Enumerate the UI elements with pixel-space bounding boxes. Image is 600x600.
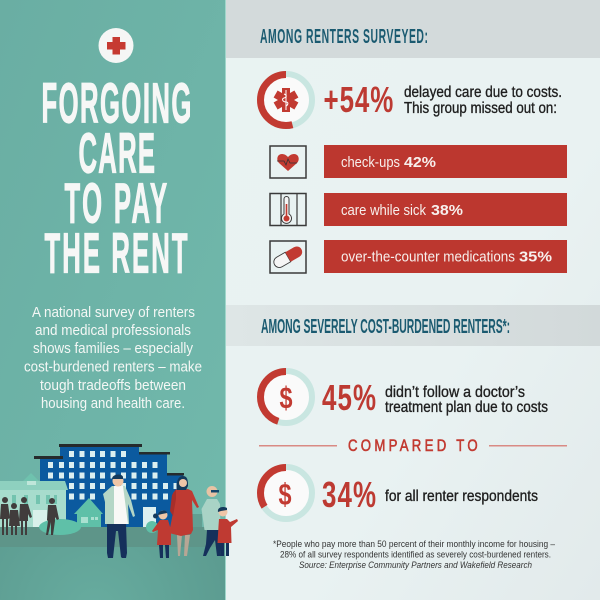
intro text block: A national survey of renters [32, 304, 195, 321]
text: delayed care description [404, 84, 562, 117]
panel: header among severely cost-burdened renters [226, 305, 600, 346]
donut chart: 45 percent with dollar sign: $ [280, 380, 292, 415]
intro text block: cost-burdened renters – make [24, 358, 202, 376]
illustration: older man [202, 486, 221, 556]
bar: check-ups 42 percent: 42% [404, 154, 436, 171]
intro text block: and medical professionals [35, 322, 191, 339]
illustration: ground [0, 527, 225, 600]
text: delayed care description: delayed care due to costs. [404, 84, 562, 101]
bar: over-the-counter medications 35 percent [324, 240, 567, 273]
text: treatment plan description: didn’t follow a doctor’s [385, 384, 525, 401]
illustration: man in jacket [103, 475, 135, 558]
text: treatment plan description [385, 384, 548, 416]
title: FORGOING [42, 72, 191, 135]
bar: care while sick 38 percent: care while sick [341, 202, 426, 219]
illustration: girl [152, 510, 171, 558]
footnote and source: Source: Enterprise Community Partners and Wakefield Research [299, 560, 532, 571]
title [42, 72, 191, 285]
donut chart: 34 percent with dollar sign: $ [278, 476, 292, 512]
illustration: apartment building [34, 444, 184, 527]
title: CARE [78, 122, 155, 185]
text: treatment plan description: treatment plan due to costs [385, 399, 548, 416]
intro text block: shows families – especially [33, 340, 193, 357]
icon: pill capsule [270, 241, 306, 273]
stat: 45 percent: 45% [322, 378, 376, 418]
bar: over-the-counter medications 35 percent: over-the-counter medications [341, 248, 515, 266]
title: THE RENT [44, 222, 188, 285]
illustration: boy [218, 507, 238, 556]
panel: header among renters surveyed: AMONG RENTERS SURVEYED: [260, 27, 428, 48]
footnote and source [273, 539, 556, 571]
bar: check-ups 42 percent: check-ups [341, 154, 400, 171]
stat: 34 percent: 34% [322, 475, 376, 515]
intro text block: housing and health care. [41, 395, 185, 412]
illustration: small house and shrubs [39, 498, 202, 535]
icon: heart with pulse [270, 146, 306, 178]
bar: check-ups 42 percent [324, 145, 567, 178]
bar: over-the-counter medications 35 percent: 35% [519, 248, 552, 266]
icon: red cross badge [98, 28, 134, 63]
text: delayed care description: This group missed out on: [404, 100, 557, 117]
title: TO PAY [64, 172, 167, 235]
intro text block [24, 304, 202, 412]
panel: header among renters surveyed [226, 0, 600, 58]
bar: care while sick 38 percent: 38% [431, 202, 463, 219]
panel: right background [226, 0, 600, 600]
illustration: silhouettes of people in the background [0, 497, 59, 535]
divider: compared to: COMPARED TO [348, 437, 478, 455]
footnote and source: 28% of all survey respondents identified as severely cost-burdened renters. [280, 550, 551, 560]
illustration: woman in red dress [169, 476, 199, 556]
panel: header among severely cost-burdened renters: AMONG SEVERELY COST-BURDENED RENTERS*: [261, 317, 510, 338]
donut chart: 34 percent with dollar sign [260, 467, 312, 519]
stat: plus 54 percent: +54% [324, 80, 393, 120]
bar: care while sick 38 percent [324, 193, 567, 226]
panel: left teal column [0, 0, 226, 600]
icon: thermometer [270, 194, 306, 226]
donut chart: 54 percent with star of life icon [260, 74, 312, 126]
illustration: left house [0, 473, 68, 527]
donut chart: 45 percent with dollar sign [260, 371, 312, 423]
footnote and source: *People who pay more than 50 percent of their monthly income for housing – [273, 539, 556, 550]
text: for all renter respondents: for all renter respondents [385, 488, 538, 505]
intro text block: tough tradeoffs between [40, 377, 186, 394]
